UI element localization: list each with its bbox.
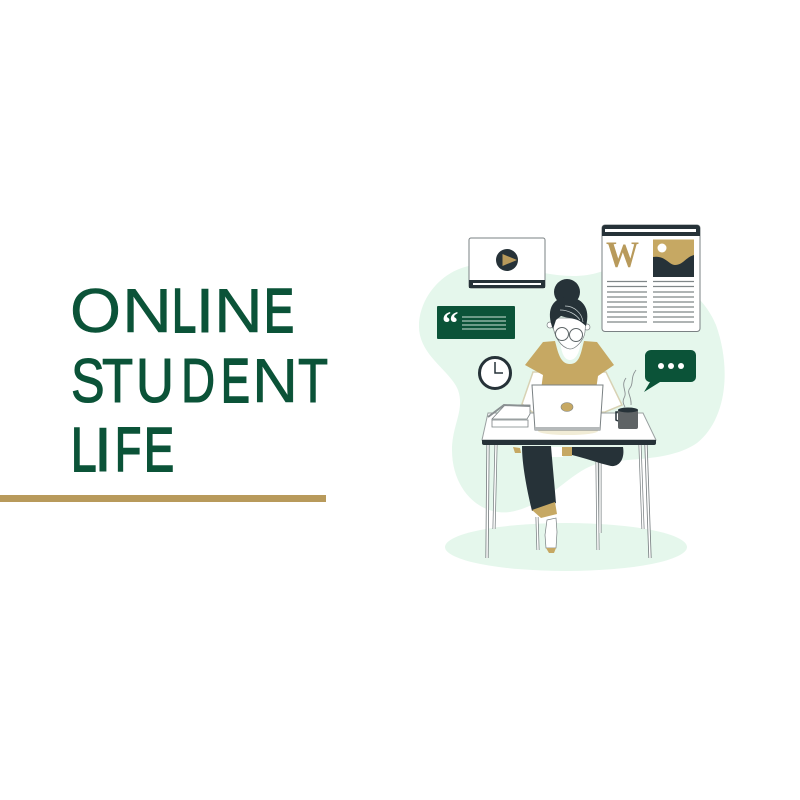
- woman: [513, 279, 623, 553]
- hair bun: [554, 279, 580, 305]
- title: N: [122, 276, 172, 346]
- trouser cuff left: [532, 502, 557, 518]
- speech bubble: [644, 350, 696, 392]
- title: F: [114, 415, 141, 485]
- title: E: [220, 346, 249, 416]
- trousers left leg: [522, 446, 556, 511]
- title: U: [136, 346, 174, 416]
- floor ellipse: [445, 523, 687, 571]
- quote card: [437, 306, 515, 342]
- title: N: [214, 276, 263, 346]
- coffee mug: [616, 370, 638, 429]
- title: L: [71, 415, 97, 485]
- video player card: [469, 238, 545, 288]
- title: E: [144, 415, 174, 485]
- title: O: [70, 276, 121, 346]
- gold foot behind desk: [513, 447, 521, 453]
- ears: [547, 322, 553, 328]
- arms: [522, 372, 622, 415]
- hair: [550, 297, 587, 329]
- steam: [623, 370, 636, 407]
- shirt: [525, 341, 614, 390]
- books: [488, 405, 530, 427]
- hair strands: [560, 306, 583, 322]
- trouser cuff right: [562, 447, 572, 456]
- clock icon: [480, 358, 510, 388]
- trousers right leg: [572, 447, 623, 466]
- title: E: [264, 276, 294, 346]
- W logo: W: [606, 235, 639, 276]
- article lines: [607, 282, 694, 322]
- quote card: “: [442, 306, 458, 342]
- glasses: [556, 328, 582, 342]
- title: T: [102, 346, 133, 416]
- desk: [482, 413, 656, 558]
- background blob: [419, 265, 725, 512]
- title: T: [298, 346, 328, 416]
- title: I: [94, 415, 112, 485]
- gold divider: [0, 495, 326, 502]
- face: [552, 318, 586, 349]
- article window: [602, 225, 700, 332]
- white shin: [550, 447, 563, 457]
- title: L: [172, 276, 197, 346]
- title: N: [252, 346, 298, 416]
- neck: [560, 340, 581, 360]
- table back legs: [494, 445, 643, 550]
- sock and foot: [545, 518, 557, 548]
- title: I: [196, 276, 214, 346]
- title: [70, 276, 328, 485]
- title: S: [71, 346, 104, 416]
- title: D: [181, 346, 215, 416]
- illustration: [419, 225, 725, 571]
- article image: [653, 240, 694, 277]
- laptop: [532, 385, 603, 435]
